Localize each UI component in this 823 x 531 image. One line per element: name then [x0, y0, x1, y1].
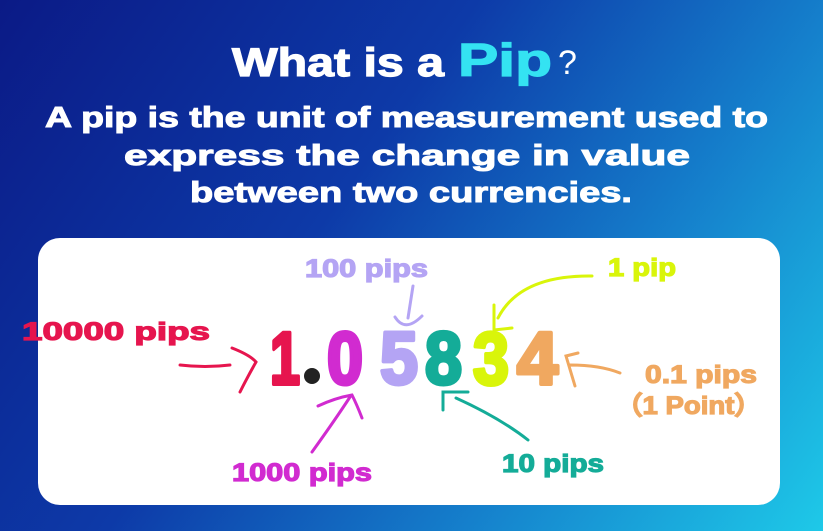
- subtitle: A pip is the unit of measurement used to: [45, 102, 768, 134]
- subtitle: express the change in value: [124, 140, 690, 172]
- labels: 100 pips: [305, 255, 428, 283]
- number 1.05834: 3: [473, 317, 509, 400]
- subtitle: between two currencies.: [190, 177, 632, 209]
- title: [232, 34, 577, 86]
- subtitle: [45, 102, 768, 209]
- title: ?: [558, 44, 577, 82]
- number 1.05834: 5: [380, 317, 418, 400]
- labels: 10000 pips: [22, 318, 210, 346]
- labels: （1 Point）: [615, 391, 762, 420]
- number 1.05834: 1: [270, 317, 300, 400]
- arrows: [180, 276, 620, 452]
- title and subtitle: [45, 34, 768, 209]
- number 1.05834: 4: [517, 317, 558, 400]
- labels: [22, 254, 762, 487]
- labels: 1 pip: [608, 254, 676, 282]
- title: Pip: [458, 34, 552, 86]
- labels: 1000 pips: [232, 459, 372, 487]
- labels: 10 pips: [502, 450, 604, 478]
- number 1.05834: [270, 317, 558, 400]
- labels: 0.1 pips: [645, 361, 757, 389]
- number 1.05834: 8: [425, 317, 462, 400]
- title: What is a: [232, 41, 445, 85]
- number 1.05834: 0: [327, 317, 363, 400]
